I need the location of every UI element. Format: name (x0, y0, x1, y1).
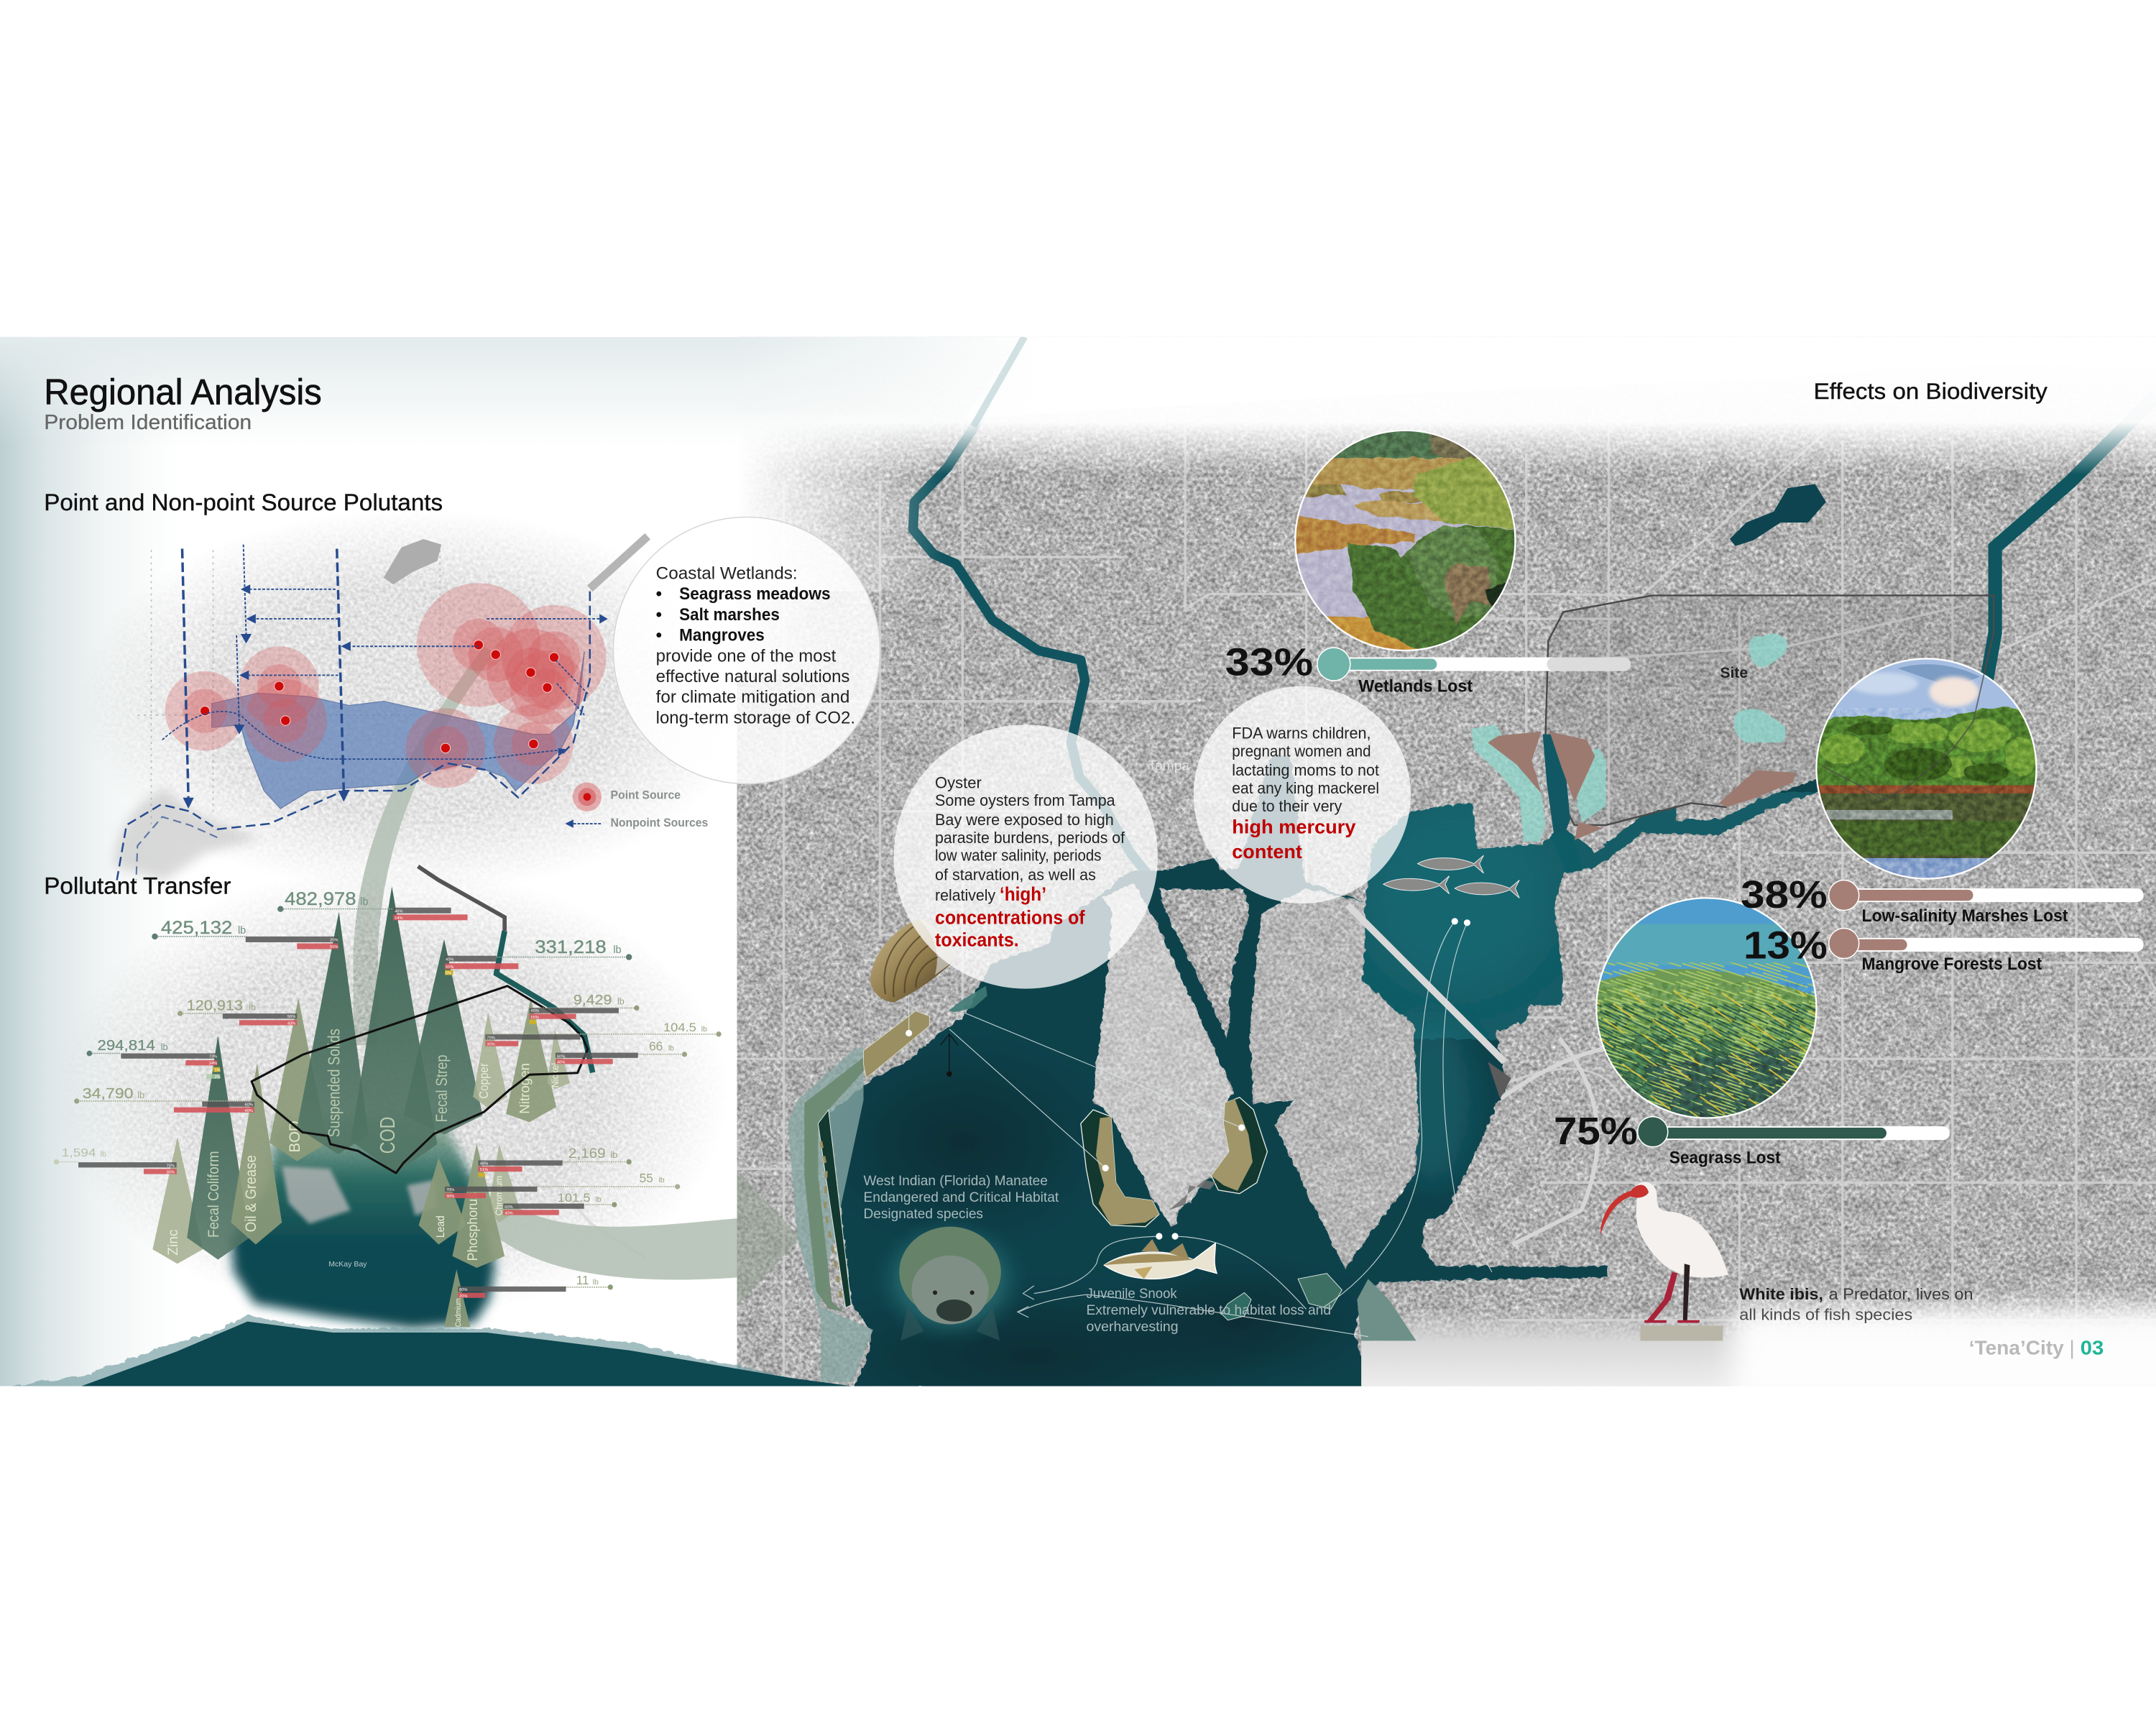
McKay Bay water (231, 1114, 495, 1328)
title: regional analysis: Problem Identification (44, 411, 252, 434)
spike Chromium: Chromium (494, 1176, 504, 1215)
row 55 lb: 30% (446, 1195, 454, 1199)
icon: manatee (870, 1214, 1030, 1346)
dark shoal triangle (1488, 1062, 1511, 1099)
row 11 lb: 20% (459, 1294, 467, 1299)
row 66 lb: 40% (557, 1061, 565, 1065)
callout: mercury: lactating moms to not (1232, 761, 1379, 779)
lake (1730, 484, 1826, 546)
gauge: wetlands lost 33% (1225, 641, 1631, 696)
dredged spoil patches (1169, 1180, 1416, 1340)
text: manatee: Designated species (864, 1207, 983, 1222)
row 11 lb: lb (593, 1278, 599, 1287)
gauge: mangrove forests lost 13%: 13% (1743, 925, 1828, 967)
row 1,594 lb: 30% (167, 1171, 175, 1175)
spike Fecal Coliform (187, 1036, 249, 1260)
callout: coastal wetlands (613, 517, 880, 784)
row 55 lb: 70% (446, 1188, 454, 1192)
spike Phosphorus (452, 1144, 505, 1268)
spike COD: COD (377, 1117, 400, 1154)
row 2,169 lb: lb (610, 1150, 617, 1160)
point source impact circles (165, 583, 607, 788)
row 1,594 lb (54, 1147, 177, 1175)
callout: mercury: pregnant women and (1232, 742, 1371, 760)
row 425,132 lb: 50% (330, 945, 338, 949)
satellite map background (737, 337, 2156, 1389)
gauge: seagrass lost 75% (1554, 1110, 1950, 1168)
row 331,218 lb (445, 937, 632, 976)
row 104.5 lb: 70% (487, 1036, 495, 1040)
row 101.5 lb: 101.5 (558, 1192, 591, 1205)
row 294,814 lb: 24% (209, 1062, 217, 1066)
site marker dots (906, 918, 1470, 1240)
callout: oyster: toxicants. (935, 929, 1019, 950)
row 34,790 lb (74, 1086, 254, 1113)
icon: juvenile snook (1104, 1239, 1217, 1279)
point source dots (200, 640, 559, 753)
curved flow band to bay map with arrowhead (482, 1170, 801, 1307)
spike Cadmium (444, 1269, 470, 1327)
top and side map fades (737, 337, 2156, 1403)
legend: map symbols: Point Source (610, 789, 681, 802)
text: manatee: Endangered and Critical Habitat (864, 1190, 1059, 1205)
row 34,790 lb: lb (137, 1090, 144, 1100)
gauge: mangrove forests lost 13%: Mangrove Forests Lost (1862, 954, 2042, 974)
spike Zinc (152, 1137, 203, 1264)
callout: oyster: ‘high’ (1000, 883, 1046, 905)
row 294,814 lb: lb (161, 1042, 168, 1052)
row 34,790 lb: 34,790 (83, 1086, 134, 1102)
row 2,169 lb: 51% (480, 1168, 488, 1172)
gauge: low-salinity marshes lost 38%: 38% (1741, 874, 1828, 916)
site boundary line (1546, 595, 1994, 825)
spike Suspended Solids (297, 911, 369, 1154)
gauge: wetlands lost 33%: Wetlands Lost (1358, 676, 1473, 696)
row 101.5 lb (503, 1192, 617, 1215)
callout: coastal wetlands: • (656, 626, 662, 645)
row 1,594 lb: lb (101, 1150, 106, 1159)
row 294,814 lb: 2% (214, 1075, 221, 1080)
text: white ibis: a Predator, lives on (1829, 1285, 1973, 1303)
spike Copper (473, 1012, 507, 1108)
row 66 lb: 60% (557, 1054, 565, 1059)
lost marsh patches (1488, 732, 1796, 840)
row 9,429 lb: lb (617, 996, 625, 1006)
spike Lead (419, 1158, 466, 1245)
title: regional analysis (44, 372, 322, 434)
spike Nickel: Nickel (550, 1063, 561, 1087)
gauge: mangrove forests lost 13% (1743, 925, 2144, 974)
gauge: seagrass lost 75%: Seagrass Lost (1669, 1149, 1781, 1168)
row 104.5 lb: 104.5 (663, 1021, 696, 1034)
seagrass patch: oyster strip (864, 1011, 929, 1078)
callout: mercury (1194, 686, 1411, 903)
row 2,169 lb (478, 1146, 632, 1177)
row 66 lb: lb (668, 1044, 674, 1053)
callout: oyster: of starvation, as well as (935, 865, 1096, 883)
river: Hillsborough (913, 378, 1152, 880)
spike Cadmium: Cadmium (454, 1298, 463, 1327)
seagrass patch: small teal island (949, 986, 987, 1012)
photo: seagrass (1595, 896, 1818, 1121)
row 425,132 lb: lb (238, 925, 246, 937)
row 120,913 lb: 120,913 (187, 998, 243, 1013)
row 101.5 lb: 60% (505, 1205, 513, 1210)
callout: oyster: Bay were exposed to high (935, 811, 1114, 829)
gauge: low-salinity marshes lost 38% (1741, 874, 2144, 926)
row 294,814 lb: 73% (209, 1054, 217, 1059)
restored wetland patches (1471, 633, 1787, 842)
row 120,913 lb: lb (249, 1002, 256, 1012)
dark reference marker (941, 1034, 958, 1077)
row 104.5 lb: 30% (487, 1043, 495, 1047)
text: white ibis: all kinds of fish species (1739, 1306, 1912, 1324)
bridge (1348, 905, 1504, 1062)
row 9,429 lb: 55% (531, 1016, 539, 1020)
callout: coastal wetlands: for climate mitigation and (656, 688, 849, 707)
row 482,978 lb: 54% (395, 916, 403, 921)
row 425,132 lb (152, 918, 338, 949)
peninsula land tint (1092, 883, 1233, 1225)
map label: site: Site (1720, 665, 1748, 681)
callout: mercury: FDA warns children, (1232, 724, 1371, 742)
callout: coastal wetlands: provide one of the most (656, 646, 837, 666)
icon: king mackerel school (1383, 855, 1519, 898)
callout: oyster: low water salinity, periods (935, 847, 1102, 865)
spike Oil and Grease: Oil & Grease (243, 1155, 259, 1232)
row 2,169 lb: 2,169 (568, 1146, 606, 1162)
spike COD (351, 886, 437, 1173)
spike Nitrogen: Nitrogen (518, 1063, 533, 1114)
bottom teal landform (0, 1313, 852, 1386)
row 482,978 lb: lb (360, 896, 368, 908)
page footer: | (2069, 1337, 2075, 1359)
row 482,978 lb (277, 889, 468, 921)
panel: pollutant load data (54, 889, 722, 1299)
site boundary outline (252, 986, 588, 1173)
row 55 lb: 55 (640, 1171, 653, 1185)
panel: pollutant spikes (152, 886, 570, 1327)
row 2,169 lb: 48% (480, 1162, 488, 1167)
callout: mercury: content (1232, 841, 1302, 862)
callout: oyster: Some oysters from Tampa (935, 791, 1115, 809)
page footer (1969, 1337, 2104, 1359)
spike Chromium (488, 1144, 520, 1223)
faded base map: point sources (102, 523, 691, 883)
text: white ibis: White ibis, (1739, 1285, 1823, 1303)
faded aerial: pollutant transfer (80, 865, 707, 1287)
spike Copper: Copper (476, 1063, 491, 1099)
icon: oyster shell (870, 919, 957, 1003)
spike Fecal Strep: Fecal Strep (433, 1054, 451, 1122)
row 331,218 lb: lb (613, 944, 621, 956)
row 120,913 lb: 43% (287, 1021, 295, 1026)
row 101.5 lb: 40% (505, 1211, 513, 1215)
spike Nickel (547, 1030, 570, 1089)
row 9,429 lb: 45% (531, 1009, 539, 1013)
callout: oyster: parasite burdens, periods of (935, 829, 1125, 847)
icon: white ibis (1600, 1182, 1728, 1340)
text: manatee (864, 1174, 1059, 1222)
row 425,132 lb: 425,132 (161, 918, 232, 938)
page footer: ‘Tena’City (1969, 1337, 2064, 1359)
legend: map symbols (565, 783, 708, 829)
nonpoint source dashed arrows (117, 545, 599, 880)
spike Zinc: Zinc (166, 1229, 181, 1256)
callout: mercury: high mercury (1232, 816, 1356, 837)
page footer: 03 (2081, 1337, 2104, 1359)
row 120,913 lb (178, 998, 297, 1026)
spike BOD: BOD (287, 1121, 303, 1152)
row 294,814 lb (87, 1038, 221, 1080)
callout: oyster: Oyster (935, 773, 982, 791)
row 55 lb: lb (658, 1176, 665, 1184)
row 331,218 lb: 331,218 (535, 937, 607, 957)
spike Lead: Lead (435, 1215, 447, 1238)
callout: oyster: relatively (935, 886, 995, 904)
row 11 lb: 80% (459, 1288, 467, 1292)
row 9,429 lb (530, 993, 639, 1024)
row 66 lb: 66 (649, 1039, 663, 1054)
text: white ibis (1739, 1285, 1973, 1324)
left panel background (0, 337, 1045, 1386)
row 104.5 lb (485, 1021, 722, 1047)
row 331,218 lb: 5% (446, 972, 451, 976)
callout: mercury: due to their very (1232, 797, 1342, 815)
port land tint (1248, 887, 1418, 1268)
text: juvenile snook: overharvesting (1086, 1320, 1179, 1335)
callout: oyster: concentrations of (935, 907, 1085, 929)
callout: coastal wetlands: • (656, 605, 662, 625)
callout: coastal wetlands: Coastal Wetlands: (656, 564, 798, 583)
watershed blue area (212, 652, 584, 809)
row 11 lb (458, 1273, 613, 1299)
curved flow band between maps (354, 646, 495, 1045)
text: juvenile snook: Juvenile Snook (1086, 1287, 1177, 1302)
west shoreline habitat bands (788, 1046, 873, 1382)
row 1,594 lb: 1,594 (62, 1147, 96, 1159)
gauge: wetlands lost 33%: 33% (1225, 641, 1313, 684)
row 120,913 lb: 56% (287, 1015, 295, 1019)
row 101.5 lb: lb (595, 1195, 602, 1204)
row 1,594 lb: 70% (167, 1164, 175, 1168)
heading: effects on biodiversity: Effects on Biodiversity (1814, 378, 2047, 404)
row 34,790 lb: 40% (245, 1109, 253, 1113)
row 66 lb (556, 1039, 687, 1065)
spike Fecal Strep (404, 939, 483, 1134)
callout: mercury: eat any king mackerel (1232, 779, 1379, 797)
row 331,218 lb: 40% (446, 957, 453, 962)
photo: wetlands (1294, 430, 1516, 651)
row 55 lb (445, 1171, 680, 1199)
legend: map symbols: Nonpoint Sources (610, 816, 708, 829)
gauge: seagrass lost 75%: 75% (1554, 1110, 1638, 1153)
row 482,978 lb: 482,978 (285, 889, 356, 909)
callout: coastal wetlands: effective natural solutions (656, 667, 849, 686)
gauge: low-salinity marshes lost 38%: Low-salinity Marshes Lost (1862, 906, 2068, 926)
heading: point and non-point: Point and Non-point Source Polutants (44, 489, 443, 515)
bay water (829, 755, 1818, 1386)
seagrass patch: L-shaped (1081, 1110, 1159, 1227)
spike Oil and Grease (231, 1063, 282, 1245)
text: juvenile snook (1086, 1287, 1331, 1335)
row 331,218 lb: 55% (446, 965, 453, 970)
spike Phosphorus: Phosphorus (466, 1192, 481, 1261)
panel: pollution source map (117, 545, 608, 880)
callout: coastal wetlands: Salt marshes (679, 605, 780, 625)
map label: Tampa: Tampa (1148, 758, 1189, 773)
row 425,132 lb: 20% (330, 939, 338, 943)
biodiversity leader lines (909, 921, 1492, 1337)
row 9,429 lb: 9,429 (573, 993, 612, 1008)
row 104.5 lb: lb (701, 1025, 707, 1034)
spike BOD (270, 998, 327, 1162)
spike Suspended Solids: Suspended Solids (325, 1029, 344, 1137)
seagrass patch: kidney (1212, 1098, 1267, 1194)
row 11 lb: 11 (576, 1273, 589, 1287)
callout: coastal wetlands: • (656, 584, 662, 604)
callout: coastal wetlands: Seagrass meadows (679, 584, 831, 604)
title: regional analysis: Regional Analysis (44, 372, 322, 413)
text: manatee: West Indian (Florida) Manatee (864, 1174, 1048, 1189)
photo: mangroves (1812, 655, 2040, 883)
spike Nitrogen (506, 998, 556, 1122)
McKay Bay water: McKay Bay (328, 1260, 367, 1269)
callout: coastal wetlands: long-term storage of CO2. (656, 708, 855, 727)
spike Fecal Coliform: Fecal Coliform (206, 1151, 222, 1238)
row 34,790 lb: 60% (245, 1103, 253, 1107)
text: juvenile snook: Extremely vulnerable to habitat loss and (1086, 1303, 1331, 1318)
heading: pollutant transfer: Pollutant Transfer (44, 873, 231, 899)
canal: east (1984, 396, 2156, 694)
channel into site (1543, 735, 1570, 833)
callout: oyster (894, 724, 1158, 989)
callout: coastal wetlands: Mangroves (679, 626, 765, 645)
row 294,814 lb: 1% (214, 1068, 221, 1072)
row 482,978 lb: 46% (395, 909, 403, 914)
row 294,814 lb: 294,814 (97, 1038, 155, 1054)
